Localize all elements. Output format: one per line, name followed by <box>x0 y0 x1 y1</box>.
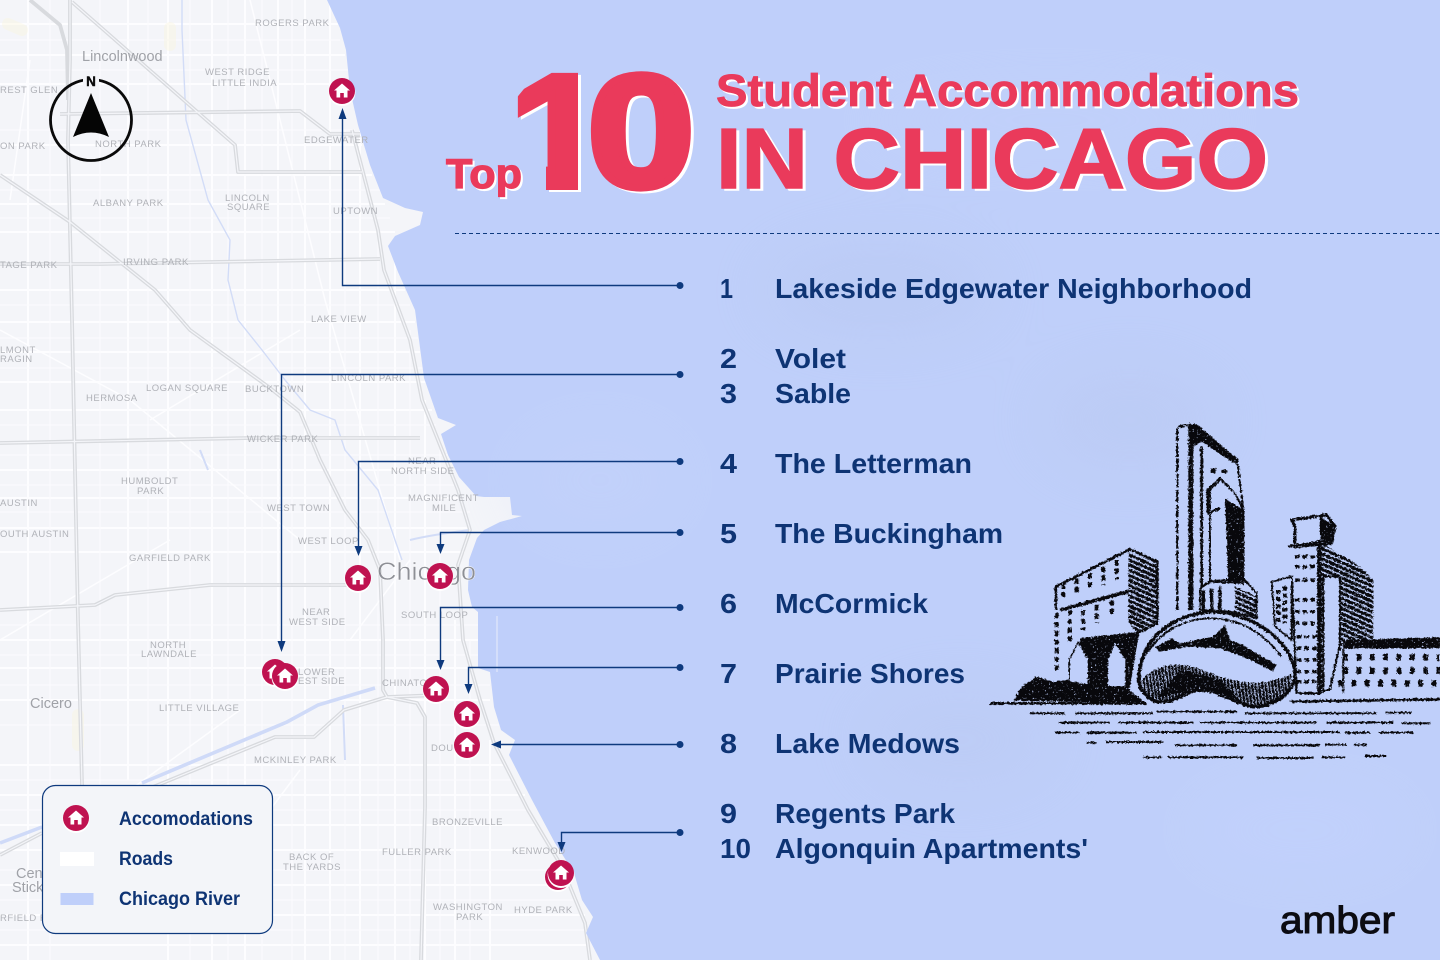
map place labels: OUTH AUSTIN <box>0 529 69 540</box>
item 7: Prairie Shores <box>775 658 965 689</box>
compass: north arrow: N <box>86 74 96 89</box>
map place labels: BRONZEVILLE <box>432 817 503 828</box>
amber logo: amber <box>1280 900 1395 942</box>
map place labels: CHINATO <box>382 678 427 689</box>
item 9: Regents Park <box>775 798 955 829</box>
map place labels: BACK OF <box>289 852 334 863</box>
map place labels: UPTOWN <box>333 206 378 217</box>
map place labels: AUSTIN <box>0 498 38 509</box>
map place labels: HYDE PARK <box>514 905 573 916</box>
map place labels <box>0 18 573 924</box>
title: 10: 1 <box>510 42 610 220</box>
map place labels: WEST SIDE <box>289 617 346 628</box>
title: IN CHICAGO: IN CHICAGO <box>716 112 1268 207</box>
map place labels: Cicero <box>30 696 72 712</box>
map place labels: RFIELD F <box>0 913 46 924</box>
title: IN CHICAGO: IN CHICAGO <box>719 114 1271 209</box>
title: 10 <box>518 71 694 194</box>
map place labels: LAKE VIEW <box>311 314 367 325</box>
leader 8 <box>491 740 684 748</box>
item 2: Volet <box>775 343 846 374</box>
legend: roads <box>60 849 173 870</box>
leader 1 <box>338 108 684 289</box>
legend <box>42 786 272 934</box>
map place labels: EST SIDE <box>298 676 345 687</box>
item 10: 10 <box>720 833 751 864</box>
item 6: McCormick <box>775 588 928 619</box>
title <box>446 71 1300 200</box>
legend: chicago river: Chicago River <box>119 889 241 910</box>
map place labels: NEAR <box>302 607 330 618</box>
map place labels: FULLER PARK <box>382 847 452 858</box>
lake michigan <box>327 0 1440 960</box>
map place labels: Chicago <box>377 558 476 586</box>
map place labels: MILE <box>432 503 456 514</box>
title: Top: Top <box>448 152 524 199</box>
rivers <box>182 0 402 560</box>
item 2: 2 <box>720 343 737 374</box>
leader lines <box>278 108 684 852</box>
map place labels: Lincolnwood <box>82 49 163 65</box>
item 10: Algonquin Apartments' <box>775 833 1088 864</box>
map place labels: KENWOOD <box>512 846 566 857</box>
item 5: The Buckingham <box>775 518 1003 549</box>
skyline illustration <box>990 424 1440 758</box>
map place labels: LMONT <box>0 345 36 356</box>
map place labels: WASHINGTON <box>433 902 503 913</box>
map place labels: IRVING PARK <box>123 257 189 268</box>
map place labels: WICKER PARK <box>247 434 318 445</box>
map place labels: RAGIN <box>0 354 33 365</box>
item 9: 9 <box>720 798 737 829</box>
item 4: The Letterman <box>775 448 972 479</box>
map place labels: NORTH PARK <box>95 139 162 150</box>
map place labels: MAGNIFICENT <box>408 493 479 504</box>
map place labels: THE YARDS <box>283 862 341 873</box>
map place labels: EDGEWATER <box>304 135 369 146</box>
leader 2-3 <box>278 371 684 652</box>
title: 10: 0 <box>590 44 698 222</box>
water texture <box>510 80 1420 880</box>
item 3: Sable <box>775 378 851 409</box>
leader 6 <box>436 604 684 670</box>
map place labels: WEST RIDGE <box>205 67 270 78</box>
map place labels: LITTLE INDIA <box>212 78 277 89</box>
leader 9-10 <box>558 829 684 852</box>
map place labels: SOUTH LOOP <box>401 610 468 621</box>
map place labels: GARFIELD PARK <box>129 553 211 564</box>
legend: chicago river <box>60 889 241 910</box>
map place labels: ON PARK <box>0 141 46 152</box>
local street grid <box>0 0 590 960</box>
right tower <box>1272 515 1373 693</box>
title: 10: 0 <box>588 42 694 220</box>
legend: accommodations <box>63 805 253 833</box>
map place labels: HERMOSA <box>86 393 138 404</box>
map place labels: NORTH <box>150 640 186 651</box>
leader 4 <box>354 458 684 556</box>
the bean sculpture <box>1139 612 1295 707</box>
item 4: 4 <box>720 448 737 479</box>
item 8: Lake Medows <box>775 728 960 759</box>
map place labels: ROGERS PARK <box>255 18 330 29</box>
map place labels: SQUARE <box>227 202 270 213</box>
map place labels: DOU <box>431 743 454 754</box>
map place labels: NEAR <box>408 456 436 467</box>
item 3 <box>720 378 851 409</box>
ground and water reflections <box>990 699 1440 758</box>
map place labels: LINCOLN <box>225 193 270 204</box>
item 1: Lakeside Edgewater Neighborhood <box>775 273 1252 304</box>
highways <box>0 0 590 960</box>
map place labels: MCKINLEY PARK <box>254 755 337 766</box>
map place labels: WEST TOWN <box>267 503 330 514</box>
item 7: 7 <box>720 658 737 689</box>
map place labels: LINCOLN PARK <box>331 373 406 384</box>
map place labels: NORTH SIDE <box>391 466 454 477</box>
legend: accommodations: Accomodations <box>119 809 253 830</box>
item 1: 1 <box>720 273 733 304</box>
accommodation list <box>720 273 1252 864</box>
map pins <box>262 78 574 892</box>
legend: roads: Roads <box>119 849 173 870</box>
map place labels: HUMBOLDT <box>121 476 178 487</box>
map place labels: LITTLE VILLAGE <box>159 703 239 714</box>
map place labels: Stick <box>12 880 44 896</box>
map place labels: PARK <box>137 486 164 497</box>
map place labels: BUCKTOWN <box>245 384 304 395</box>
title: Top: Top <box>446 150 522 197</box>
item 3: 3 <box>720 378 737 409</box>
low building <box>1338 637 1440 693</box>
item 8: 8 <box>720 728 737 759</box>
map place labels: LAWNDALE <box>141 649 197 660</box>
tall tower <box>1177 424 1257 618</box>
item 5: 5 <box>720 518 737 549</box>
map place labels: ALBANY PARK <box>93 198 164 209</box>
leader 5 <box>436 529 684 554</box>
map place labels: LOGAN SQUARE <box>146 383 228 394</box>
leader 7 <box>464 664 684 694</box>
item 6: 6 <box>720 588 737 619</box>
map place labels: WEST LOOP <box>298 536 359 547</box>
map place labels: LOWER <box>298 667 335 678</box>
title: Student Accommodations: Student Accommodations <box>716 65 1299 116</box>
map place labels: PARK <box>456 912 483 923</box>
left building <box>1013 549 1157 703</box>
title: 10: 1 <box>512 44 612 222</box>
item 2 <box>720 343 846 374</box>
map place labels: Cen <box>16 866 43 882</box>
title: Student Accommodations: Student Accommodations <box>718 67 1301 118</box>
map place labels: REST GLEN <box>0 85 58 96</box>
compass: north arrow <box>50 74 132 160</box>
map place labels: TAGE PARK <box>0 260 58 271</box>
